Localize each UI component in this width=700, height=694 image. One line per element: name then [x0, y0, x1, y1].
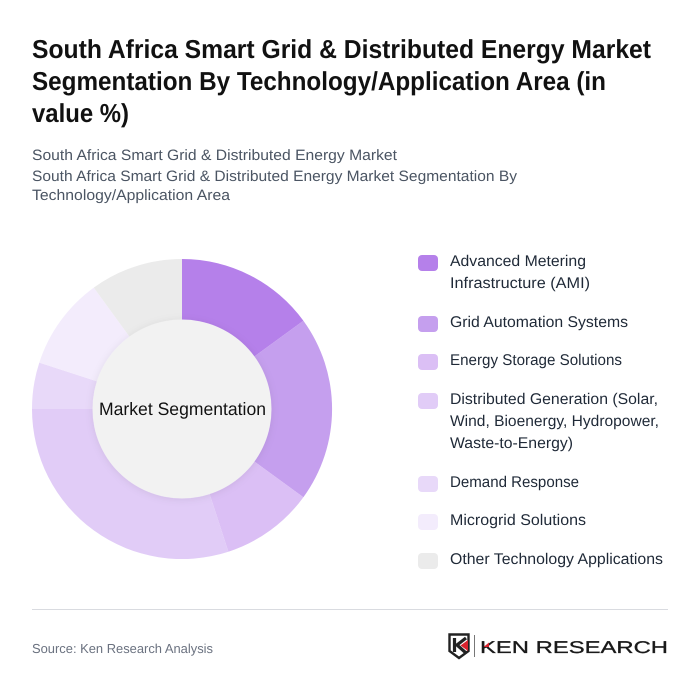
legend item: Energy Storage Solutions: Energy Storage Solutions	[450, 352, 622, 369]
title: South Africa Smart Grid & Distributed Energy Market	[32, 34, 651, 64]
subtitle: Technology/Application Area	[32, 187, 231, 204]
legend item: Distributed Generation: Wind, Bioenergy, Hydropower,	[450, 413, 659, 430]
title: value %)	[32, 98, 129, 128]
icon: shield K	[450, 634, 468, 658]
title	[32, 34, 651, 128]
title: Segmentation By Technology/Application Area (in	[32, 66, 606, 96]
segment: Distributed Generation	[32, 409, 228, 559]
legend item: Grid Automation Systems: Grid Automation Systems	[450, 314, 628, 331]
segment: Microgrid Solutions	[39, 288, 182, 409]
wordmark: KEN RESEARCH	[480, 638, 668, 657]
subtitle: South Africa Smart Grid & Distributed Energy Market	[32, 147, 398, 164]
legend item: Advanced Metering Infrastructure (AMI): Infrastructure (AMI)	[450, 275, 590, 292]
source note: Source: Ken Research Analysis	[32, 641, 213, 656]
segment: Grid Automation Systems	[182, 321, 332, 497]
centre label: Market Segmentation	[99, 399, 266, 419]
legend	[418, 253, 663, 569]
subtitle: South Africa Smart Grid & Distributed Energy Market Segmentation By	[32, 168, 518, 185]
donut centre	[92, 320, 272, 498]
legend item: Advanced Metering Infrastructure (AMI)	[418, 253, 590, 292]
legend item: Demand Response: Demand Response	[450, 474, 579, 491]
legend item: Microgrid Solutions: Microgrid Solutions	[450, 512, 586, 529]
subtitle	[32, 147, 518, 204]
legend item: Advanced Metering Infrastructure (AMI): Advanced Metering	[450, 253, 586, 270]
legend item: Other Technology Applications: Other Technology Applications	[450, 551, 663, 568]
segment: Energy Storage Solutions	[182, 409, 303, 552]
legend item: Distributed Generation	[418, 391, 659, 452]
segment: Advanced Metering Infrastructure	[182, 259, 303, 409]
legend item: Distributed Generation: Waste-to-Energy)	[450, 435, 573, 452]
logo: Ken Research	[450, 634, 668, 658]
segment: Other Technology Applications	[94, 259, 182, 409]
donut chart	[32, 259, 332, 559]
segment: Demand Response	[32, 363, 182, 409]
legend item: Distributed Generation: Distributed Generation (Solar,	[450, 391, 658, 408]
